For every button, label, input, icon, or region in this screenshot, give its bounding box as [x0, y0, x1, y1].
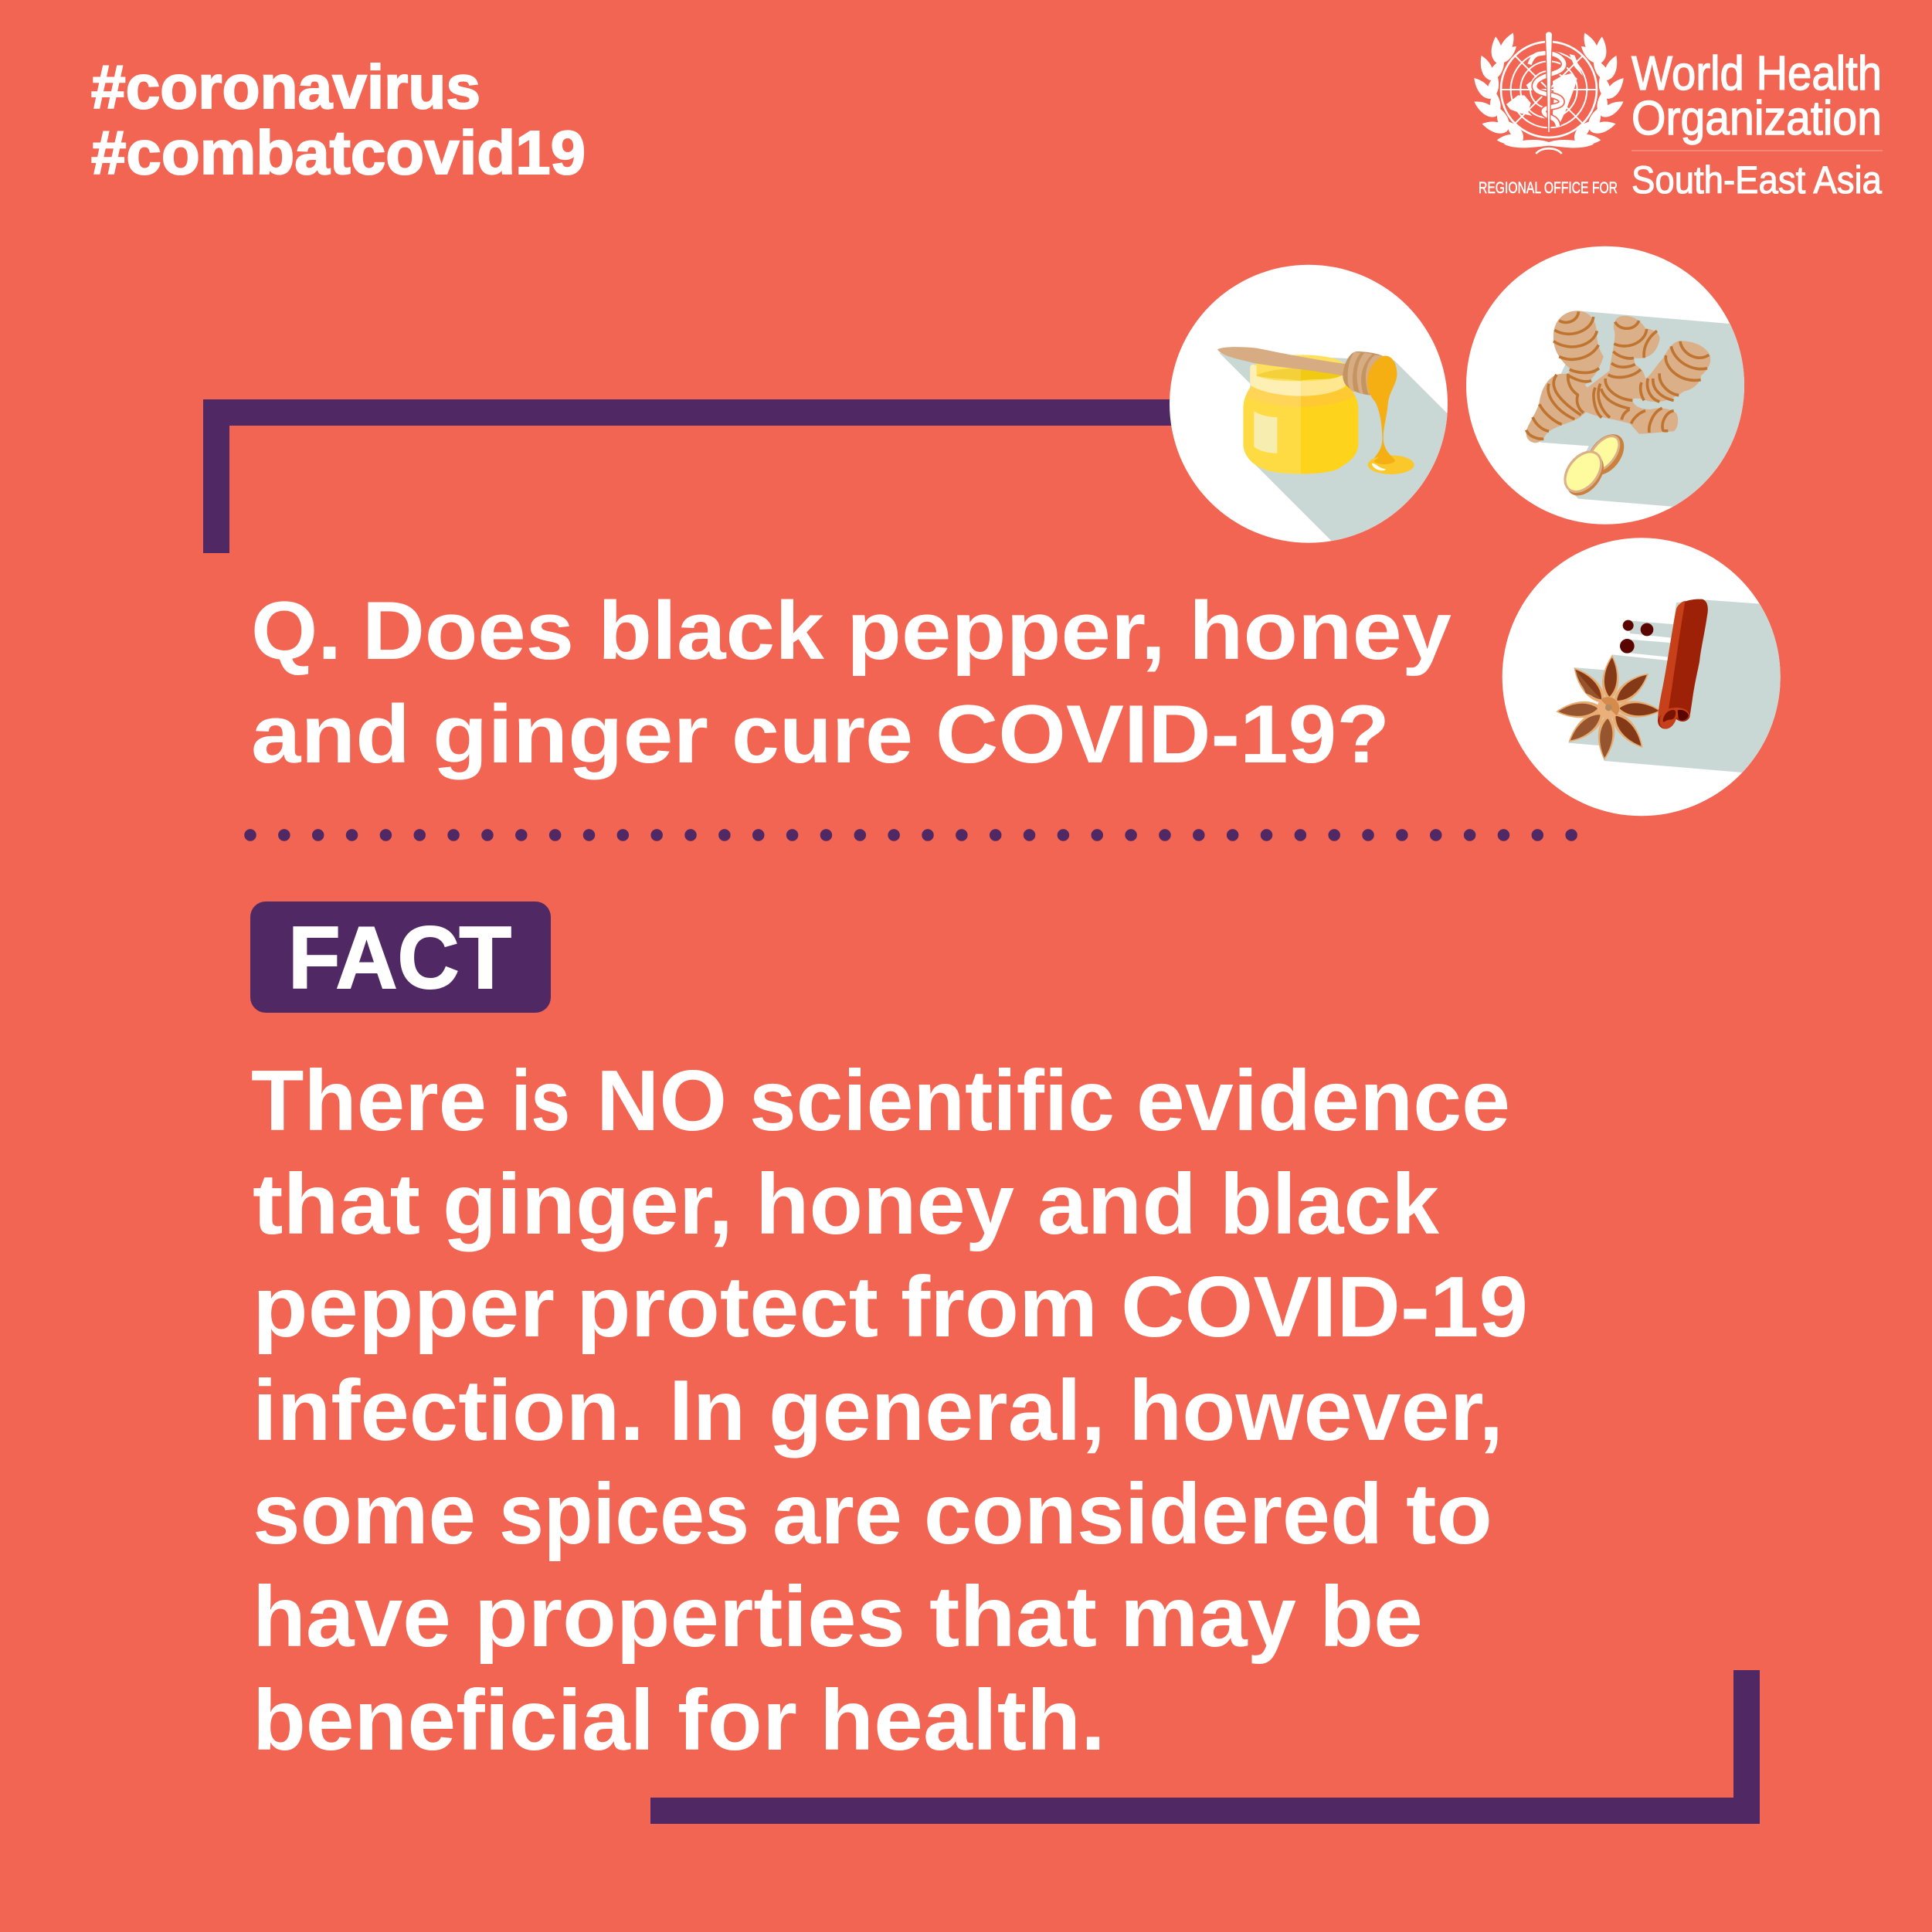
honey pool: [1368, 444, 1414, 474]
honey dipper: [1217, 347, 1383, 396]
fact body text: and: [1037, 1156, 1197, 1252]
question heading: and: [251, 688, 410, 780]
question heading: ginger: [433, 688, 708, 780]
spice long shadow: [1568, 599, 1781, 772]
ginger root: [1526, 311, 1710, 443]
honey long shadow: [1219, 352, 1448, 541]
icon: spices circle: [1502, 538, 1802, 816]
question heading: pepper,: [847, 584, 1166, 677]
honey jar body: [1243, 355, 1358, 474]
question heading: honey: [1189, 584, 1452, 677]
logo: WHO South-East Asia: [1470, 31, 1883, 202]
fact body text: some: [253, 1466, 476, 1562]
icon: ginger circle: [1466, 246, 1764, 525]
logo wordmark: South-East Asia: [1632, 158, 1882, 202]
ginger slices: [1564, 434, 1624, 496]
question heading: Does: [362, 584, 574, 677]
fact body text: be: [1319, 1569, 1423, 1665]
fact body text: ginger,: [443, 1156, 733, 1252]
fact body text: black: [1220, 1156, 1439, 1252]
fact body text: is: [511, 1053, 570, 1149]
fact body text: properties: [474, 1569, 905, 1665]
question heading: Q.: [251, 584, 341, 677]
fact body text: general,: [769, 1363, 1105, 1458]
fact body text: are: [772, 1466, 902, 1562]
frame: bottom-right bracket: [650, 1670, 1760, 1824]
question heading: black: [598, 584, 825, 677]
fact body text: that: [929, 1569, 1097, 1665]
fact body text: scientific: [749, 1053, 1115, 1149]
fact body text: spices: [499, 1466, 749, 1562]
black peppercorns: [1620, 620, 1653, 654]
FACT badge: [250, 901, 551, 1013]
ginger long shadow: [1540, 311, 1744, 507]
fact body text: COVID-19: [1121, 1259, 1528, 1355]
fact body text: that: [253, 1156, 420, 1252]
honey drip: [1367, 356, 1397, 464]
question heading: [251, 584, 1452, 780]
hashtags: #combatcovid19: [91, 118, 586, 187]
fact body text: There: [251, 1053, 487, 1149]
hashtags: [91, 53, 586, 187]
frame: top-left bracket: [203, 399, 1182, 553]
cinnamon stick: [1658, 599, 1708, 729]
fact body text: honey: [755, 1156, 1014, 1252]
fact body text: however,: [1129, 1363, 1503, 1458]
fact body text: protect: [576, 1259, 878, 1355]
fact body text: In: [669, 1363, 745, 1458]
fact body text: to: [1406, 1466, 1492, 1562]
FACT badge: FACT: [288, 909, 511, 1007]
fact body text: may: [1120, 1569, 1296, 1665]
logo wordmark: World Health: [1632, 47, 1882, 100]
icon: WHO emblem: [1470, 31, 1628, 154]
fact body text: NO: [596, 1053, 727, 1149]
fact body text: beneficial: [253, 1672, 654, 1768]
fact body text: pepper: [253, 1259, 555, 1355]
star anise: [1555, 654, 1662, 761]
fact body text: [251, 1053, 1528, 1768]
fact body text: evidence: [1136, 1053, 1510, 1149]
logo wordmark: Organization: [1632, 92, 1882, 145]
fact body text: considered: [924, 1466, 1383, 1562]
dotted divider: [250, 829, 1572, 841]
fact body text: for: [677, 1672, 797, 1768]
fact body text: health.: [820, 1672, 1105, 1768]
logo wordmark: REGIONAL OFFICE FOR: [1479, 179, 1618, 197]
fact body text: have: [253, 1569, 451, 1665]
hashtags: #coronavirus: [91, 53, 480, 121]
fact body text: from: [901, 1259, 1098, 1355]
question heading: cure: [732, 688, 913, 780]
fact body text: infection.: [253, 1363, 644, 1458]
icon: honey jar circle: [1170, 264, 1448, 543]
question heading: COVID-19?: [935, 688, 1390, 780]
logo wordmark: [1479, 47, 1883, 202]
